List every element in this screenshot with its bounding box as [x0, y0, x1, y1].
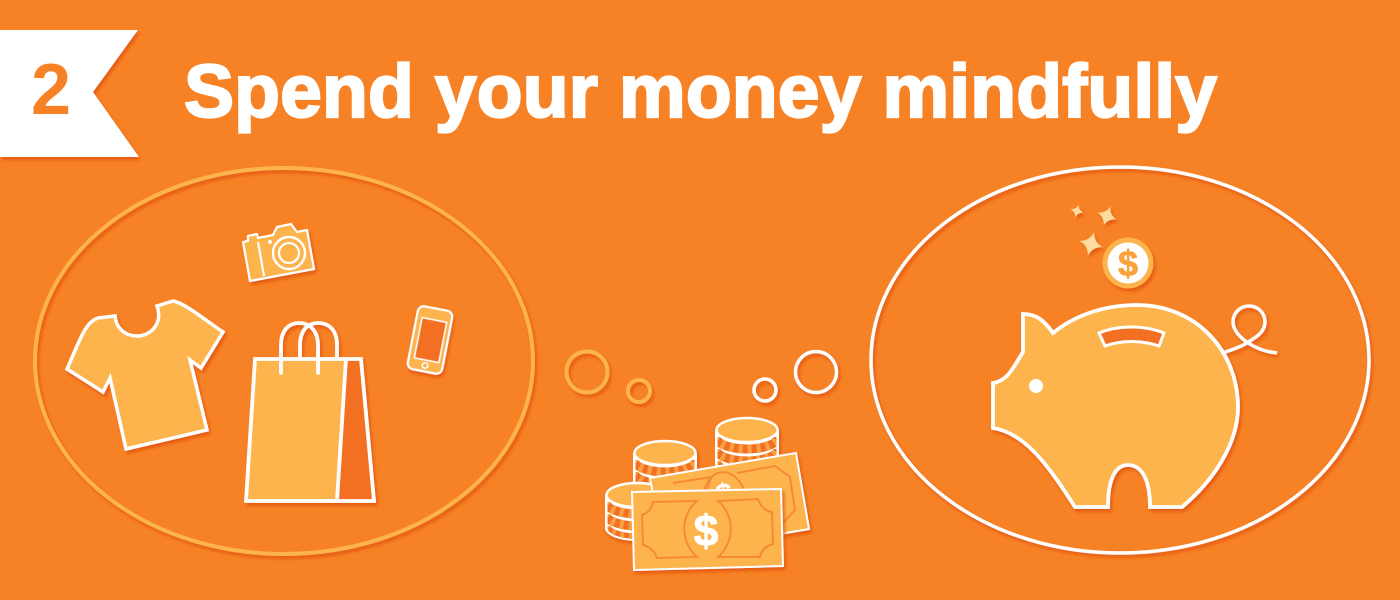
icon: piggy bank [993, 305, 1277, 507]
icon: dollar coin: $ [1118, 243, 1138, 284]
front banknote [632, 489, 783, 570]
illustration: coins and banknotes [605, 418, 809, 570]
pig tail [1225, 306, 1277, 353]
coin stacks [605, 418, 779, 541]
left thought bubble: spending [35, 168, 533, 554]
number flag badge: 2 [31, 50, 71, 130]
front banknote: $ [694, 507, 718, 556]
icon: camera [243, 224, 314, 281]
number flag badge [0, 30, 139, 157]
icon: shopping bag [246, 323, 374, 501]
icon: dollar coin [1102, 238, 1154, 288]
right thought bubble: saving [871, 167, 1369, 553]
icon: phone [407, 305, 453, 375]
thought dots: right [754, 352, 836, 401]
icon: t-shirt [67, 301, 223, 449]
icon: sparkle stars [1069, 203, 1120, 259]
pig body [993, 305, 1238, 507]
thought dots: left [566, 352, 650, 402]
title: Spend your money mindfully [184, 49, 1217, 133]
back banknote: $ [713, 477, 736, 512]
pig eye [1029, 379, 1043, 393]
coin slot [1099, 327, 1164, 346]
back banknote [650, 453, 809, 554]
